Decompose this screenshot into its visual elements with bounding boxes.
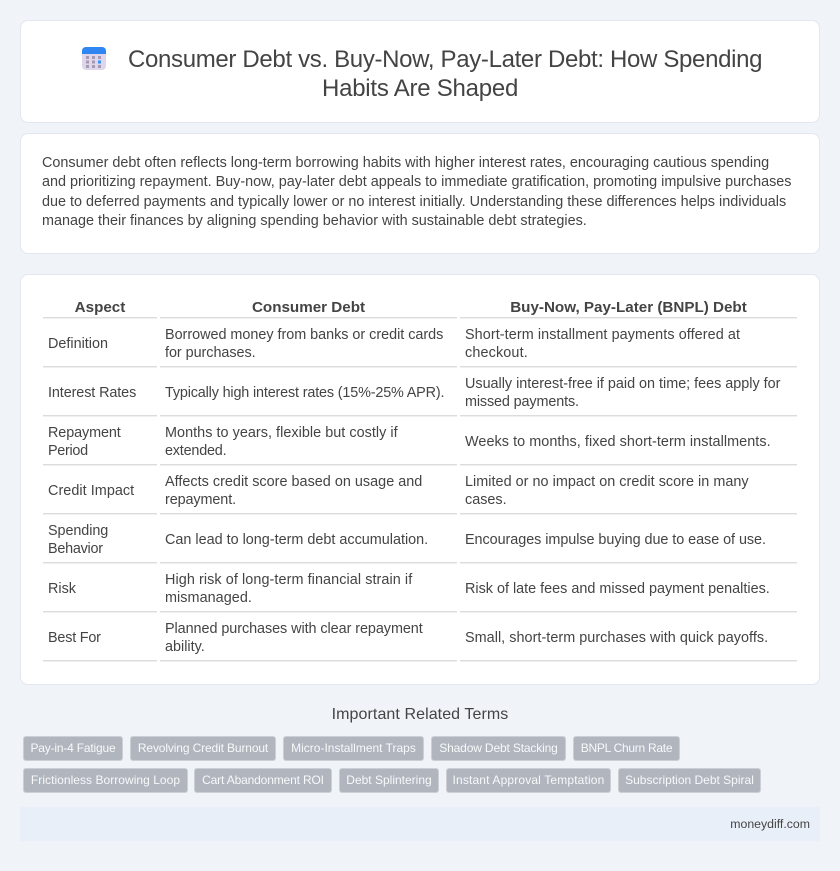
row: Repayment Period: extended. [165,443,226,459]
heading: related terms: Important Related Terms [332,706,508,723]
row: Spending Behavior: Encourages impulse buying due to ease of use. [465,532,766,548]
row: Repayment Period: Period [48,443,88,459]
table header: Consumer Debt [252,299,365,316]
related term tags: Subscription Debt Spiral [625,773,754,787]
related term tags: Frictionless Borrowing Loop [31,773,180,787]
related term tags: Micro-Installment Traps [291,741,416,755]
row: Credit Impact: Affects credit score based on usage and [165,474,422,490]
row: Risk: mismanaged. [165,590,252,606]
row: Risk: Risk [48,581,76,597]
title [128,46,762,102]
table header [43,299,797,319]
table header: Aspect [75,299,125,316]
row: Credit Impact [43,474,797,515]
row: Best For: ability. [165,639,205,655]
row: Interest Rates: Typically high interest rates (15%-25% APR). [165,385,444,401]
row: Spending Behavior: Spending [48,523,108,539]
title: Habits Are Shaped [322,75,518,102]
related term tags: BNPL Churn Rate [581,741,672,755]
row: Best For: Planned purchases with clear repayment [165,621,423,637]
row: Spending Behavior: Can lead to long-term debt accumulation. [165,532,428,548]
row: Repayment Period [43,425,797,466]
row: Repayment Period: Repayment [48,425,121,441]
row: Credit Impact: repayment. [165,492,236,508]
table header: Buy-Now, Pay-Later (BNPL) Debt [510,299,747,316]
row: Credit Impact: cases. [465,492,507,508]
row: Definition: Short-term installment payments offered at [465,327,740,343]
related term tags: Pay-in-4 Fatigue [30,741,116,755]
row: Best For: Best For [48,630,101,646]
panel: title card [20,20,820,123]
intro paragraph: and prioritizing repayment. Buy-now, pay-later debt appeals to immediate gratification, promoting impulsive purchases [42,174,792,190]
row: Interest Rates: missed payments. [465,394,579,410]
related term tags: Shadow Debt Stacking [439,741,558,755]
row: Credit Impact: Limited or no impact on credit score in many [465,474,749,490]
row: Spending Behavior [43,523,797,564]
intro paragraph: due to deferred payments and typically lower or no interest initially. Understanding these differences helps individuals [42,194,786,210]
intro paragraph: Consumer debt often reflects long-term borrowing habits with higher interest rates, encouraging cautious spending [42,155,769,171]
panel: intro text [20,133,820,254]
row: Spending Behavior: Behavior [48,541,103,557]
related term tags: Revolving Credit Burnout [138,741,268,755]
row: Interest Rates: Interest Rates [48,385,136,401]
row: Best For [43,621,797,662]
row: Interest Rates [43,376,797,417]
row: Best For: Small, short-term purchases with quick payoffs. [465,630,768,646]
row: Repayment Period: Weeks to months, fixed short-term installments. [465,434,771,450]
footer source text: moneydiff.com [730,817,810,831]
row: Risk [43,572,797,613]
row: Interest Rates: Usually interest-free if paid on time; fees apply for [465,376,780,392]
row: Definition: Borrowed money from banks or credit cards [165,327,443,343]
row: Definition: Definition [48,336,108,352]
row: Risk: High risk of long-term financial strain if [165,572,412,588]
intro paragraph [42,155,792,229]
row: Definition [43,327,797,368]
footer [20,807,820,841]
row: Repayment Period: Months to years, flexible but costly if [165,425,398,441]
related term tags: Instant Approval Temptation [453,773,604,787]
related term tags [23,736,761,793]
row: Definition: for purchases. [165,345,256,361]
panel: comparison table [20,274,820,685]
row: Risk: Risk of late fees and missed payment penalties. [465,581,770,597]
row: Credit Impact: Credit Impact [48,483,134,499]
title: Consumer Debt vs. Buy-Now, Pay-Later Debt: How Spending [128,46,762,73]
related term tags: Debt Splintering [346,773,432,787]
row: Definition: checkout. [465,345,528,361]
intro paragraph: manage their finances by aligning spending behavior with sustainable debt strategies. [42,213,587,229]
related term tags: Cart Abandonment ROI [202,773,324,787]
icon: calendar [82,47,106,70]
